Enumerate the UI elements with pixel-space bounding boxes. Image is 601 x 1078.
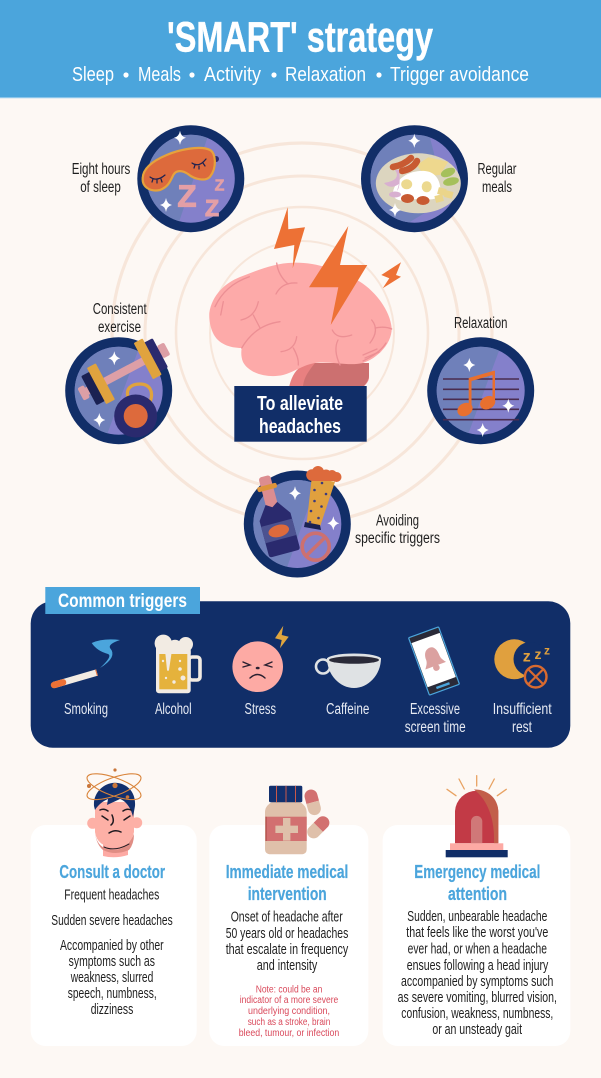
heading tab <box>45 587 200 614</box>
icon: sleep mask badge <box>137 125 245 232</box>
central label box <box>234 386 367 442</box>
panel: emergency medical attention <box>383 776 570 1046</box>
text: consult a doctor: speech, numbness, <box>68 986 157 1002</box>
text: emergency: attention <box>448 884 507 904</box>
icon: smartphone <box>409 627 459 695</box>
text: emergency: Sudden, unbearable headache <box>407 909 547 925</box>
note: indicator of a more severe <box>240 995 339 1006</box>
icon: beer mug <box>155 635 200 693</box>
note: bleed, tumour, or infection <box>239 1028 339 1039</box>
icon: moon with zzz <box>494 639 550 688</box>
panel: common triggers <box>31 587 570 748</box>
text: emergency: ensues following a head injury <box>407 958 549 974</box>
text: intervention: intervention <box>248 884 327 904</box>
subtitle: Relaxation <box>285 63 366 86</box>
label: screen time: Excessive <box>410 701 460 718</box>
icon: moon with zzz: z <box>523 648 531 666</box>
text: emergency <box>398 862 557 1038</box>
icon: siren <box>446 776 508 857</box>
text: intervention: Onset of headache after <box>231 910 343 926</box>
label: insufficient rest <box>493 701 552 736</box>
text: emergency: or an unsteady gait <box>432 1022 522 1038</box>
text: intervention: 50 years old or headaches <box>226 926 348 942</box>
label: insufficient rest: rest <box>512 719 533 736</box>
label: screen time <box>405 701 466 736</box>
text: consult a doctor: Frequent headaches <box>64 887 159 903</box>
icon: sleep mask badge: Z <box>178 179 197 214</box>
panel: common triggers: Smoking <box>64 701 108 718</box>
panel: common triggers: Alcohol <box>155 701 192 718</box>
label: exercise: exercise <box>98 319 141 336</box>
text: emergency: ever had, or when a headache <box>408 942 547 958</box>
icon: dizzy man <box>84 768 144 857</box>
note: underlying condition, <box>248 1006 330 1017</box>
text: consult a doctor: symptoms such as <box>69 954 155 970</box>
icon: avoided triggers badge <box>244 466 352 578</box>
label: meals <box>478 161 516 196</box>
icon: cigarette <box>54 639 120 685</box>
title: 'SMART' strategy <box>167 14 433 62</box>
text: consult a doctor: Consult a doctor <box>59 862 165 882</box>
label: relaxation: Relaxation <box>454 315 507 332</box>
label: exercise <box>93 301 147 336</box>
central label box: headaches <box>259 416 341 438</box>
icon: meal plate badge <box>361 125 470 232</box>
text: intervention <box>226 862 349 974</box>
text: consult a doctor: weakness, slurred <box>70 970 153 986</box>
icon: coffee cup <box>316 654 381 688</box>
panel: immediate medical intervention <box>209 786 368 1046</box>
note: Note: could be an <box>256 984 322 995</box>
subtitle: Meals <box>138 63 181 86</box>
text: consult a doctor: Sudden severe headaches <box>51 913 173 929</box>
subtitle: Activity <box>204 63 262 86</box>
text: intervention: that escalate in frequency <box>226 942 349 958</box>
panel: common triggers: Caffeine <box>326 701 369 718</box>
icon: dumbbell and kettlebell badge <box>65 330 177 444</box>
subtitle <box>72 63 529 86</box>
heading tab: Common triggers <box>58 591 187 612</box>
panel: common triggers: Stress <box>245 701 276 718</box>
subtitle: Trigger avoidance <box>390 63 529 86</box>
icon: moon with zzz: z <box>534 646 542 662</box>
text: consult a doctor: Accompanied by other <box>60 938 164 954</box>
label: meals: meals <box>482 179 512 196</box>
text: emergency: Emergency medical <box>414 862 540 882</box>
subtitle: Sleep <box>72 63 114 86</box>
label: triggers <box>355 513 440 547</box>
text: intervention: Immediate medical <box>226 862 348 882</box>
icon: music note badge <box>427 337 535 444</box>
concentric rings <box>112 143 492 523</box>
label: sleep: of sleep <box>80 179 121 196</box>
note <box>239 984 339 1039</box>
label: sleep <box>72 161 130 196</box>
text: consult a doctor <box>51 862 173 1018</box>
text: emergency: that feels like the worst you've <box>406 925 548 941</box>
note: such as a stroke, brain <box>248 1017 330 1028</box>
label: exercise: Consistent <box>93 301 147 318</box>
lightning bolts <box>274 207 401 325</box>
label: screen time: screen time <box>405 719 466 736</box>
label: triggers: specific triggers <box>355 530 440 547</box>
icon: medicine bottle and pills <box>265 786 332 854</box>
icon: moon with zzz: z <box>544 644 550 658</box>
label: meals: Regular <box>478 161 516 178</box>
text: consult a doctor: dizziness <box>91 1002 133 1018</box>
text: intervention: and intensity <box>257 958 318 974</box>
panel: consult a doctor <box>31 768 197 1046</box>
header banner <box>0 0 601 98</box>
label: insufficient rest: Insufficient <box>493 701 552 718</box>
icon: sleep mask badge: Z <box>205 195 219 221</box>
central label box: To alleviate <box>257 393 343 415</box>
label: triggers: Avoiding <box>376 513 419 530</box>
icon: sleep mask badge: Z <box>215 178 225 195</box>
icon: stressed face <box>232 626 289 692</box>
label: sleep: Eight hours <box>72 161 130 178</box>
brain illustration <box>209 207 401 390</box>
